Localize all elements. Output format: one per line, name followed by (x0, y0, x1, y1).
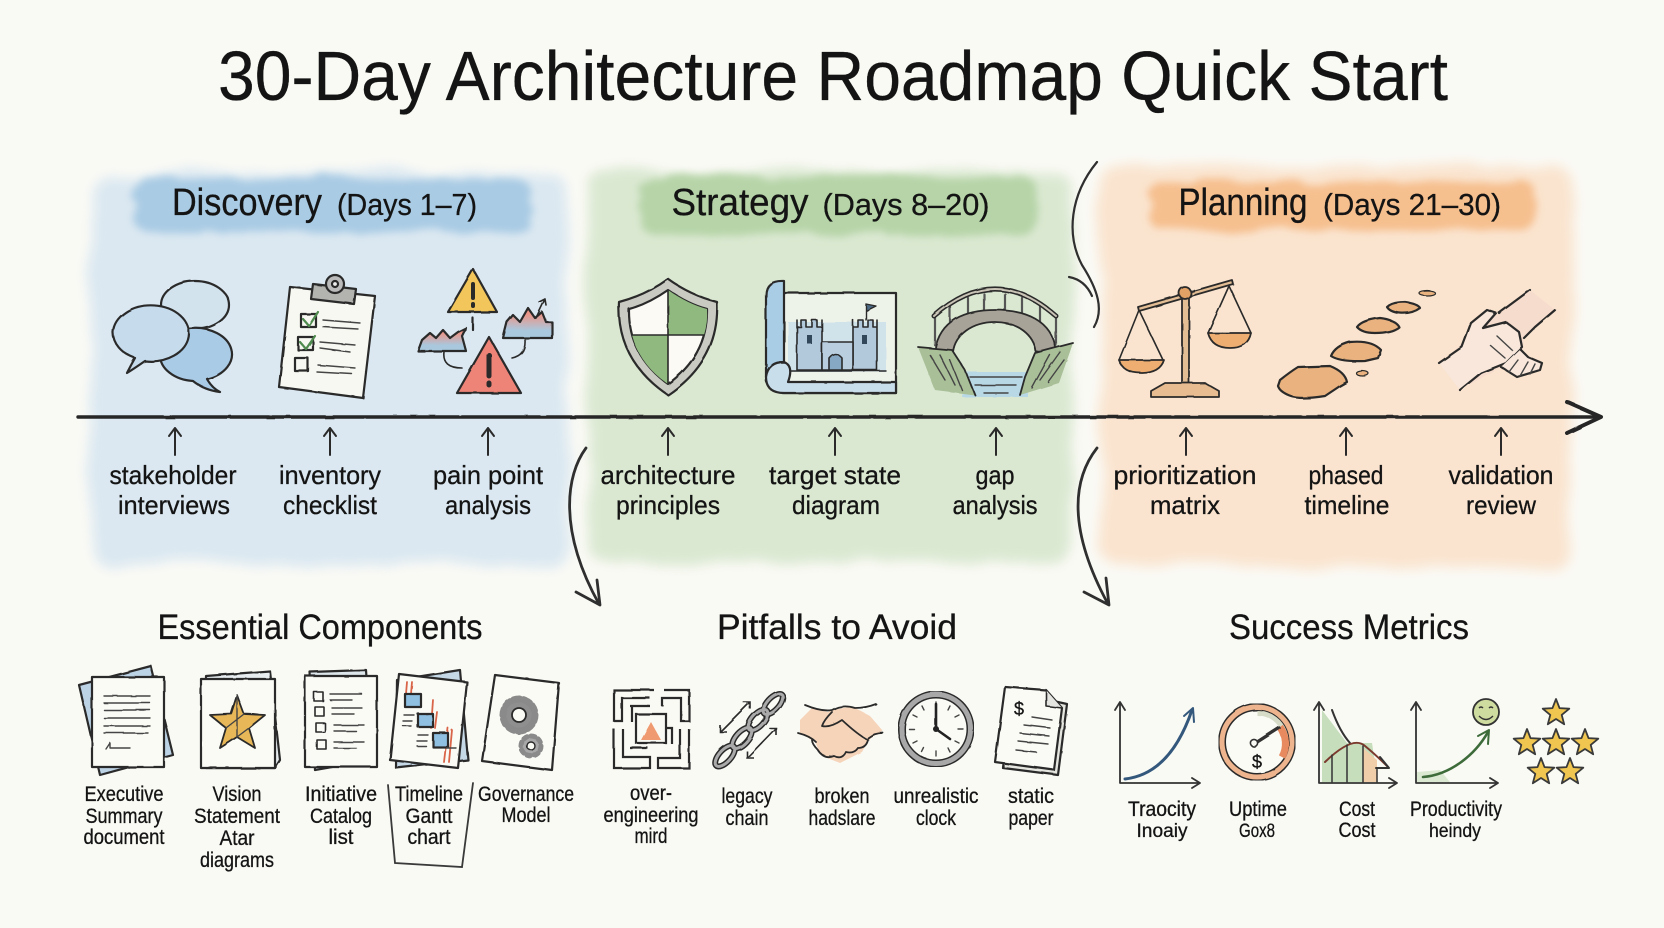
timeline arrow (78, 402, 1601, 433)
marker: phased timeline: timeline (1304, 490, 1390, 520)
marker: prioritization matrix: prioritization (1114, 460, 1256, 490)
item: unrealistic clock (894, 694, 978, 830)
item: broken handshake: hadslare (808, 807, 876, 830)
marker: stakeholder interviews (110, 428, 237, 520)
marker: gap analysis: analysis (952, 490, 1038, 520)
marker: target state diagram: diagram (792, 490, 880, 520)
item: timeline gantt: Timeline (395, 783, 463, 806)
title: 30-Day Architecture Roadmap Quick Start (218, 37, 1448, 115)
item: vision statement: diagrams (200, 849, 274, 872)
marker: pain point analysis (433, 428, 544, 520)
item: governance model: Governance (478, 783, 574, 806)
heading: planning (1178, 182, 1501, 224)
item: productivity chart: heindy (1429, 821, 1481, 842)
marker: validation review (1448, 428, 1554, 520)
item: star rating (1514, 699, 1598, 783)
panel: discovery (90, 172, 566, 564)
arrow: strategy to success metrics (1078, 448, 1109, 605)
icon: balance scale (1119, 280, 1251, 397)
icon: castle blueprint (766, 281, 896, 393)
item: static paper: $ (1014, 699, 1024, 719)
item: uptime gauge: $ (1252, 752, 1262, 772)
panel: strategy (588, 172, 1073, 562)
icon: helping hands (1439, 290, 1555, 390)
marker: gap analysis: gap (976, 460, 1014, 490)
item: productivity chart (1410, 699, 1502, 842)
icon: stepping stones (1278, 290, 1435, 398)
heading: strategy: Strategy (672, 182, 808, 224)
marker: validation review: review (1466, 490, 1536, 520)
panel: planning (1102, 166, 1572, 566)
item: uptime gauge (1222, 707, 1292, 842)
item: executive summary: document (84, 826, 165, 849)
item: cost chart: Cost (1339, 798, 1375, 821)
item: timeline gantt: chart (408, 826, 451, 849)
item: timeline gantt (388, 670, 473, 867)
item: governance model (478, 675, 574, 827)
icon: bridge over gap (918, 289, 1073, 397)
marker: inventory checklist (279, 428, 381, 520)
arrow: discovery to pitfalls (570, 448, 600, 605)
item: broken handshake: broken (814, 785, 870, 808)
marker: pain point analysis: pain point (433, 460, 544, 490)
item: velocity chart: Traocity (1128, 798, 1196, 821)
marker: stakeholder interviews: stakeholder (110, 460, 237, 490)
marker: target state diagram: target state (769, 460, 901, 490)
icon: smiley (1473, 699, 1499, 725)
marker: architecture principles: principles (616, 490, 720, 520)
arrow: strategy to planning bracket (1069, 162, 1099, 327)
item: executive summary (79, 666, 173, 849)
item: initiative catalog (305, 670, 377, 849)
heading: strategy (672, 182, 990, 224)
marker: prioritization matrix (1114, 428, 1256, 520)
item: over-engineering: mird (634, 825, 668, 848)
item: initiative catalog: Initiative (305, 783, 377, 806)
item: cost chart: Cost (1338, 819, 1376, 842)
marker: phased timeline: phased (1308, 460, 1384, 490)
marker: architecture principles (600, 428, 736, 520)
heading: discovery (172, 182, 477, 224)
item: uptime gauge: Uptime (1229, 798, 1287, 821)
item: uptime gauge: Gox8 (1239, 821, 1275, 842)
marker: architecture principles: architecture (600, 460, 736, 490)
item: static paper (995, 687, 1067, 830)
section: pitfalls (604, 608, 1067, 848)
item: over-engineering: over- (630, 782, 672, 805)
item: vision statement: Statement (194, 805, 280, 828)
item: executive summary: Executive (84, 783, 164, 806)
heading: pitfalls: Pitfalls to Avoid (717, 608, 957, 647)
icon: speech bubbles (113, 281, 232, 392)
item: static paper: paper (1008, 807, 1054, 830)
item: unrealistic clock: clock (916, 807, 956, 830)
item: productivity chart: Productivity (1410, 798, 1502, 821)
marker: prioritization matrix: matrix (1150, 490, 1220, 520)
heading: planning: (Days 21–30) (1323, 187, 1501, 222)
marker: pain point analysis: analysis (445, 490, 531, 520)
icon: shield (619, 279, 717, 395)
item: vision statement: Atar (220, 827, 255, 850)
item: legacy chain: chain (726, 807, 768, 830)
marker: target state diagram (769, 428, 901, 520)
item: over-engineering: engineering (604, 804, 698, 827)
section: essential components (79, 608, 574, 872)
item: broken handshake (798, 704, 883, 830)
heading: discovery: (Days 1–7) (337, 187, 477, 222)
section: success metrics (1115, 608, 1598, 842)
icon: clipboard checklist (279, 275, 375, 398)
heading: essential components: Essential Components (158, 608, 482, 647)
item: cost chart (1314, 702, 1397, 842)
item: initiative catalog: Catalog (310, 805, 372, 828)
marker: inventory checklist: inventory (279, 460, 381, 490)
item: unrealistic clock: unrealistic (894, 785, 978, 808)
decoration: sketched trapezoid around label (388, 783, 473, 867)
heading: planning: Planning (1178, 182, 1308, 224)
marker: inventory checklist: checklist (283, 490, 378, 520)
heading: discovery: Discovery (172, 182, 322, 224)
marker: gap analysis (952, 428, 1038, 520)
item: vision statement: Vision (212, 783, 262, 806)
item: initiative catalog: list (328, 826, 354, 849)
heading: strategy: (Days 8–20) (822, 187, 990, 222)
marker: validation review: validation (1448, 460, 1554, 490)
item: velocity chart (1115, 702, 1200, 842)
heading: success metrics: Success Metrics (1229, 608, 1469, 647)
item: timeline gantt: Gantt (406, 805, 453, 828)
marker: stakeholder interviews: interviews (118, 490, 230, 520)
marker: phased timeline (1304, 428, 1390, 520)
item: over-engineering (604, 690, 698, 848)
item: governance model: Model (502, 804, 550, 827)
item: vision statement (194, 671, 280, 872)
item: static paper: static (1008, 785, 1054, 808)
item: executive summary: Summary (86, 805, 163, 828)
icon: pain point warnings (418, 269, 552, 393)
item: velocity chart: Inoaiy (1136, 821, 1188, 842)
item: legacy chain (712, 690, 786, 830)
item: legacy chain: legacy (722, 785, 773, 808)
